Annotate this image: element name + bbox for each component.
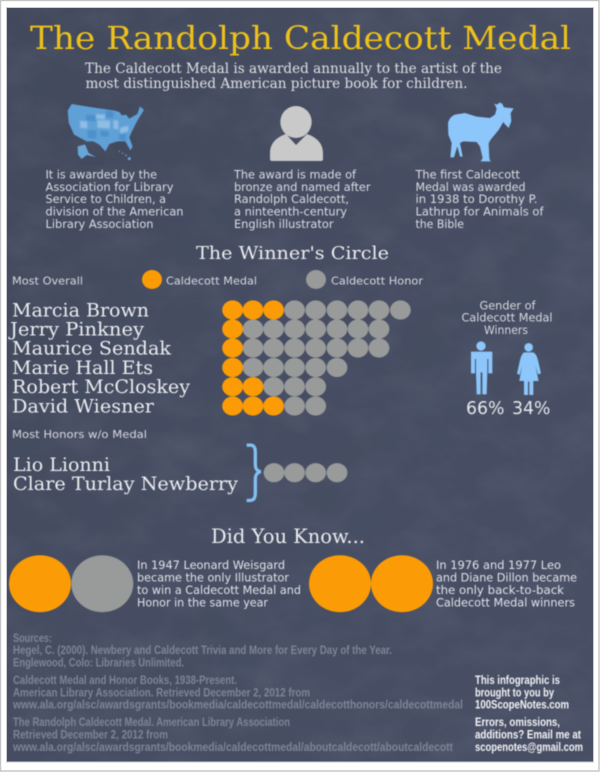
text block: bronze award: English illustrator xyxy=(234,217,334,231)
credits: Errors, omissions, xyxy=(475,717,560,729)
legend: Most Overall xyxy=(12,274,83,288)
fact: Dillon text: and Diane Dillon became xyxy=(436,570,577,584)
Alaska xyxy=(78,144,96,159)
credits xyxy=(475,675,583,754)
winners names: David Wiesner xyxy=(12,396,155,418)
text block: first medal xyxy=(415,168,544,231)
legend xyxy=(12,270,423,289)
sources: www.ala.org/alsc/awardsgrants/bookmedia/caldecottmedal/caldecotthonors/caldecottmedal xyxy=(12,700,463,712)
heading: The Winner's Circle: The Winner's Circle xyxy=(196,243,389,264)
winners names: Robert McCloskey xyxy=(12,376,190,398)
credits: additions? Email me at xyxy=(475,730,581,742)
text block: bronze award: Randolph Caldecott, xyxy=(234,192,349,206)
fact: Weisgard text: to win a Caldecott Medal and xyxy=(137,583,301,597)
sources: Retrieved December 2, 2012 from xyxy=(13,730,168,742)
intro text xyxy=(85,61,502,92)
text block: Association: Library Association xyxy=(46,217,154,231)
winners names: Marie Hall Ets xyxy=(12,357,153,379)
winners names: Marcia Brown xyxy=(12,300,149,322)
heading: Did You Know: Did You Know... xyxy=(211,525,365,548)
sources: Sources: xyxy=(13,633,52,645)
text block: first medal: Lathrup for Animals of xyxy=(416,204,544,218)
sources: American Library Association. Retrieved December 2, 2012 from xyxy=(13,688,310,700)
honors names: Clare Turlay Newberry xyxy=(13,473,238,495)
text block: bronze award xyxy=(233,168,371,231)
text block: Association: It is awarded by the xyxy=(46,168,157,182)
winners names: Jerry Pinkney xyxy=(8,318,144,340)
sources: Hegel, C. (2000). Newbery and Caldecott Trivia and More for Every Day of the Year. xyxy=(13,645,392,657)
legend: Caldecott Honor xyxy=(331,274,423,288)
fact: Weisgard text xyxy=(137,558,301,610)
gender heading: Winners xyxy=(484,323,528,337)
icon: female figure xyxy=(517,343,541,395)
icon: map of the United States xyxy=(68,104,144,160)
text block: bronze award: a ninteenth-century xyxy=(234,204,347,218)
credits: 100ScopeNotes.com xyxy=(475,700,569,712)
text block: Association: Service to Children, a xyxy=(46,192,166,206)
icon: male figure xyxy=(471,341,492,394)
gender heading: Caldecott Medal xyxy=(462,310,552,324)
gender heading: Gender of xyxy=(480,298,536,312)
brace xyxy=(247,445,261,500)
honors names: Lio Lionni xyxy=(13,454,110,476)
text block: bronze award: bronze and named after xyxy=(234,180,371,194)
winners names: Maurice Sendak xyxy=(12,338,171,360)
text block: first medal: in 1938 to Dorothy P. xyxy=(416,192,538,206)
gender heading xyxy=(462,298,552,337)
fact: Dillon text: In 1976 and 1977 Leo xyxy=(436,558,561,572)
fact: Dillon text: Caldecott Medal winners xyxy=(436,596,575,610)
sources: The Randolph Caldecott Medal. American Library Association xyxy=(13,717,290,729)
winners names xyxy=(8,300,190,418)
sources: Englewood, Colo: Libraries Unlimited. xyxy=(13,658,184,670)
fact: Dillon text xyxy=(436,558,577,610)
dot chart: medals and honors xyxy=(222,300,411,416)
sources: Caldecott Medal and Honor Books, 1938-Present. xyxy=(13,675,237,687)
label: most honors without medal: Most Honors w/o Medal xyxy=(12,428,147,441)
credits: brought to you by xyxy=(475,688,554,700)
honors names xyxy=(13,454,238,495)
text block: Association: Association for Library xyxy=(46,180,174,194)
credits: This infographic is xyxy=(475,675,560,687)
dot chart: honors only xyxy=(264,463,347,482)
text block: Association: division of the American xyxy=(46,204,184,218)
fact: Weisgard circles xyxy=(9,555,133,612)
fact: Dillon text: the only back-to-back xyxy=(436,583,564,597)
gender percentages: 66% xyxy=(466,399,504,419)
gender percentages: 34% xyxy=(512,399,550,419)
fact: Weisgard text: Honor in the same year xyxy=(137,596,268,610)
gender percentages xyxy=(466,399,550,419)
text block: first medal: the Bible xyxy=(416,217,464,231)
icon: goat xyxy=(448,103,514,161)
sources xyxy=(12,633,463,754)
title: The Randolph Caldecott Medal xyxy=(30,19,571,57)
intro text: The Caldecott Medal is awarded annually to the artist of the xyxy=(85,61,502,77)
fact: Weisgard text: In 1947 Leonard Weisgard xyxy=(137,558,285,572)
icon: person xyxy=(270,106,323,161)
text block: first medal: Medal was awarded xyxy=(416,180,526,194)
fact: Dillon circles xyxy=(309,555,433,612)
legend: Caldecott Medal xyxy=(166,274,257,288)
fact: Weisgard text: became the only Illustrator xyxy=(137,570,289,584)
text block: Association xyxy=(46,168,184,231)
text block: bronze award: The award is made of xyxy=(233,168,357,182)
sources: www.ala.org/alsc/awardsgrants/bookmedia/caldecottmedal/aboutcaldecott/aboutcaldecott xyxy=(12,742,453,754)
text block: first medal: The first Caldecott xyxy=(415,168,520,182)
Hawaii xyxy=(119,151,131,160)
intro text: most distinguished American picture book for children. xyxy=(86,76,468,92)
